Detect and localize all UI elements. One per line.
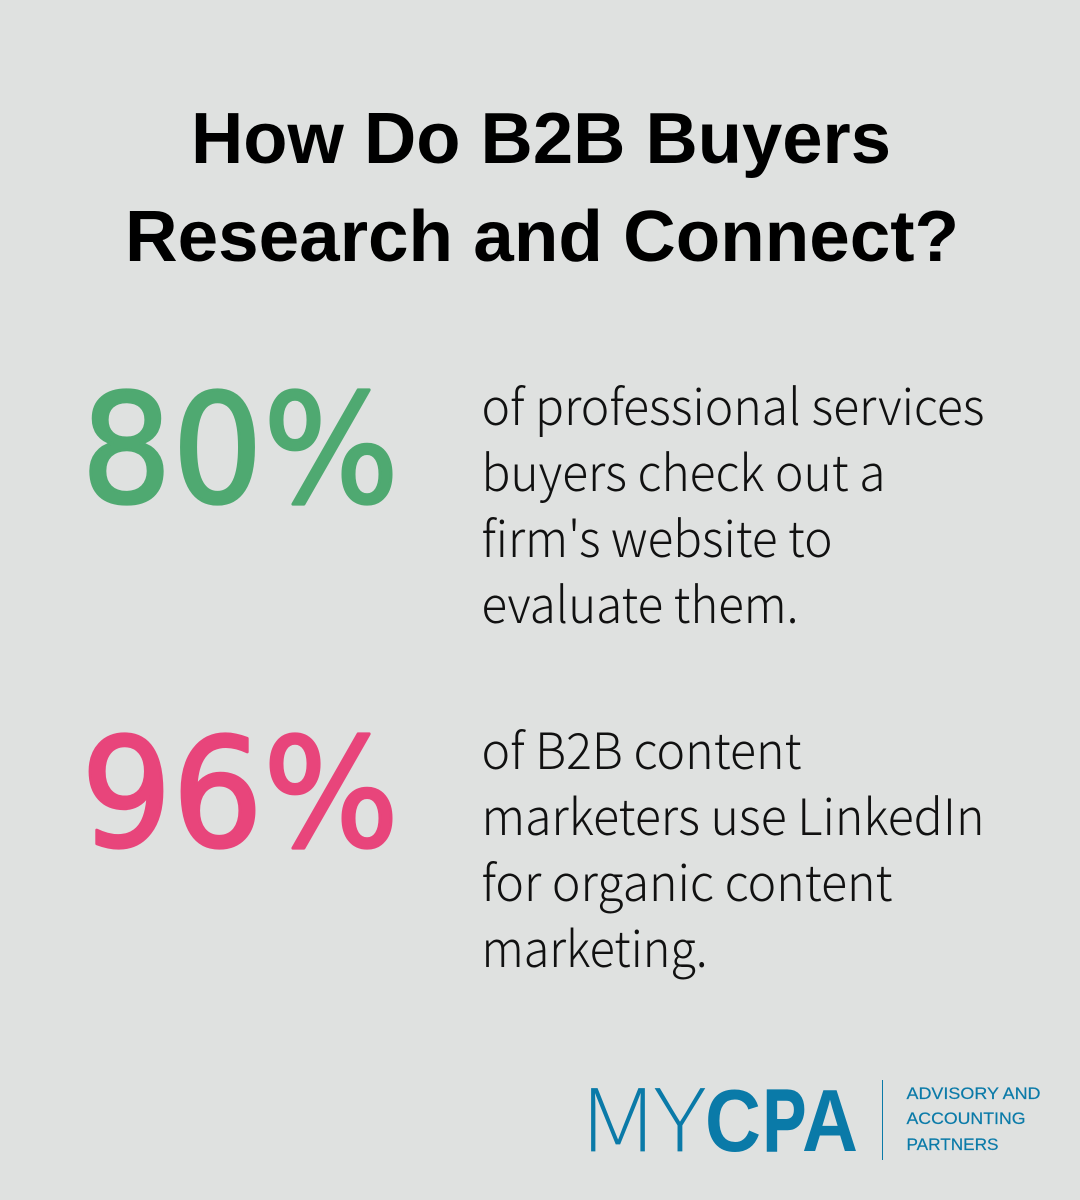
logo tagline: PARTNERS	[906, 1135, 998, 1154]
stat number: 80%: 80%	[81, 362, 399, 538]
stat: 96%	[81, 706, 984, 982]
logo wordmark: P	[763, 1071, 806, 1170]
stat description: LinkedIn usage: for organic content	[482, 844, 892, 916]
logo wordmark: C	[705, 1071, 761, 1170]
logo: MyCPA	[581, 1051, 1040, 1176]
stat description: website evaluation	[482, 368, 984, 638]
stat description: website evaluation: buyers check out a	[482, 434, 886, 506]
title: Research and Connect?	[125, 197, 959, 277]
logo wordmark: A	[802, 1071, 858, 1170]
stat description: LinkedIn usage: marketers use LinkedIn	[482, 778, 984, 850]
logo wordmark: Y	[655, 1051, 706, 1176]
stat description: website evaluation: evaluate them.	[482, 566, 798, 638]
logo wordmark: M	[581, 1051, 655, 1176]
title	[125, 99, 959, 277]
stat: 80%	[81, 362, 984, 638]
logo wordmark	[581, 1051, 858, 1176]
stat description: LinkedIn usage: marketing.	[482, 910, 708, 982]
stat number: 96%: 96%	[81, 706, 399, 882]
stat description: website evaluation: of professional services	[482, 368, 984, 440]
title: How Do B2B Buyers	[191, 99, 891, 179]
stat description: website evaluation: firm's website to	[482, 500, 832, 572]
logo tagline: ADVISORY AND	[906, 1084, 1040, 1103]
stat description: LinkedIn usage	[482, 712, 984, 982]
logo tagline	[906, 1084, 1040, 1154]
stat description: LinkedIn usage: of B2B content	[482, 712, 802, 784]
logo tagline: ACCOUNTING	[906, 1109, 1026, 1128]
